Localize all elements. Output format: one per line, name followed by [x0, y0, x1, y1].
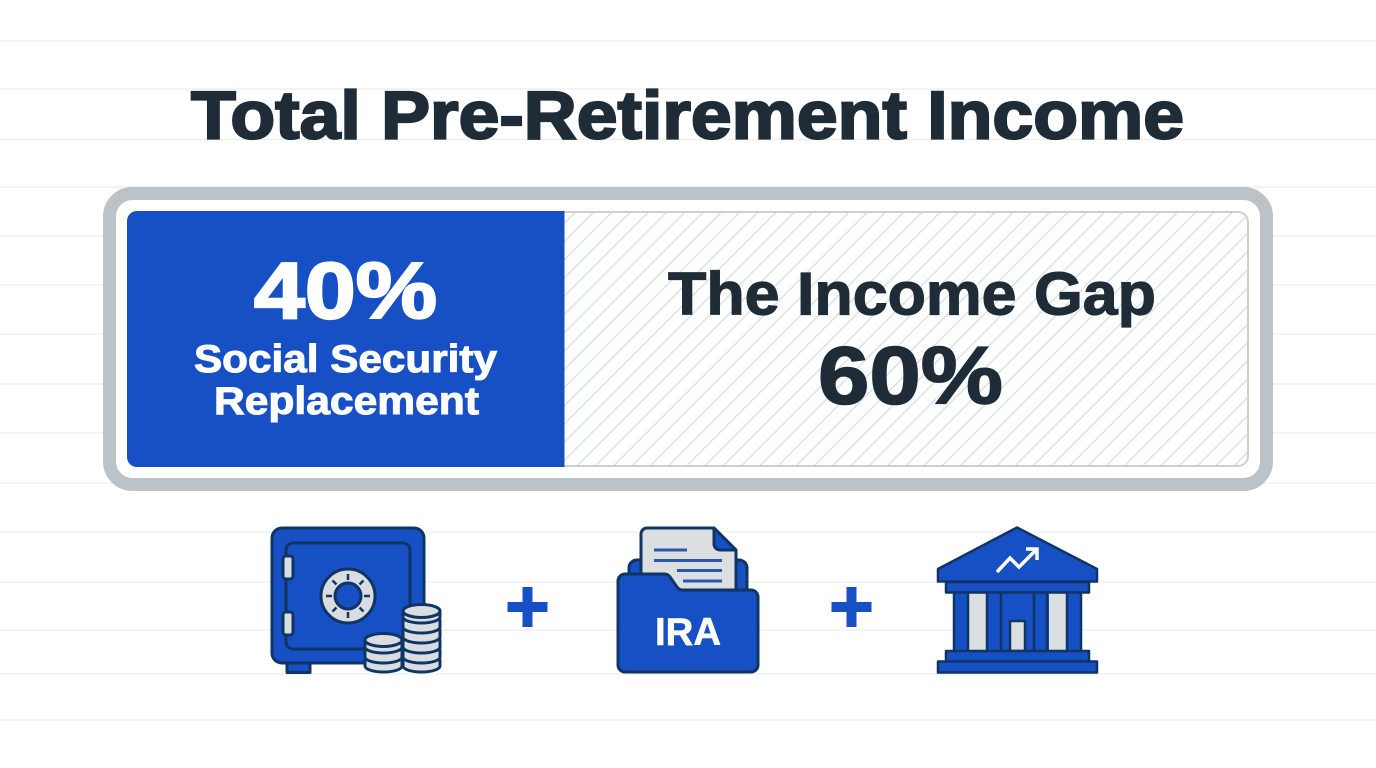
upper base: [946, 651, 1089, 662]
income gap label: The Income Gap: [668, 260, 1156, 328]
income gap hatched segment: [128, 212, 1248, 466]
panel: income bar: [110, 194, 1266, 484]
safe door: [286, 543, 410, 649]
40% value: 40%: [254, 246, 437, 335]
column dividers: [968, 592, 1067, 651]
60% value: 60%: [818, 330, 1003, 422]
door: [1010, 621, 1025, 651]
plus sign: [508, 587, 548, 627]
plus sign: [832, 587, 872, 627]
white columns: [969, 592, 1066, 651]
lower base: [938, 662, 1097, 672]
document: [641, 528, 736, 600]
roof: [938, 528, 1097, 582]
safe foot: [287, 660, 310, 672]
icon: safe with coins: [272, 528, 440, 672]
social security label: Replacement: [214, 380, 479, 423]
social security blue segment: [127, 211, 564, 467]
social security label: [194, 338, 497, 423]
hinges: [283, 556, 293, 635]
entablature: [946, 582, 1089, 592]
folder back: [629, 560, 747, 590]
dial: [321, 569, 375, 623]
IRA label: IRA: [655, 611, 721, 654]
coin stacks: [365, 604, 440, 672]
bar outer frame: [110, 194, 1266, 484]
columns backdrop: [954, 592, 1081, 652]
icon: bank with growth arrow: [938, 528, 1097, 672]
social security label: Social Security: [194, 338, 497, 381]
icon: IRA folder: [618, 528, 758, 672]
title: Total Pre-Retirement Income: [191, 78, 1184, 154]
folder front: [618, 574, 758, 672]
growth arrow: [997, 549, 1037, 572]
safe body: [272, 528, 424, 663]
